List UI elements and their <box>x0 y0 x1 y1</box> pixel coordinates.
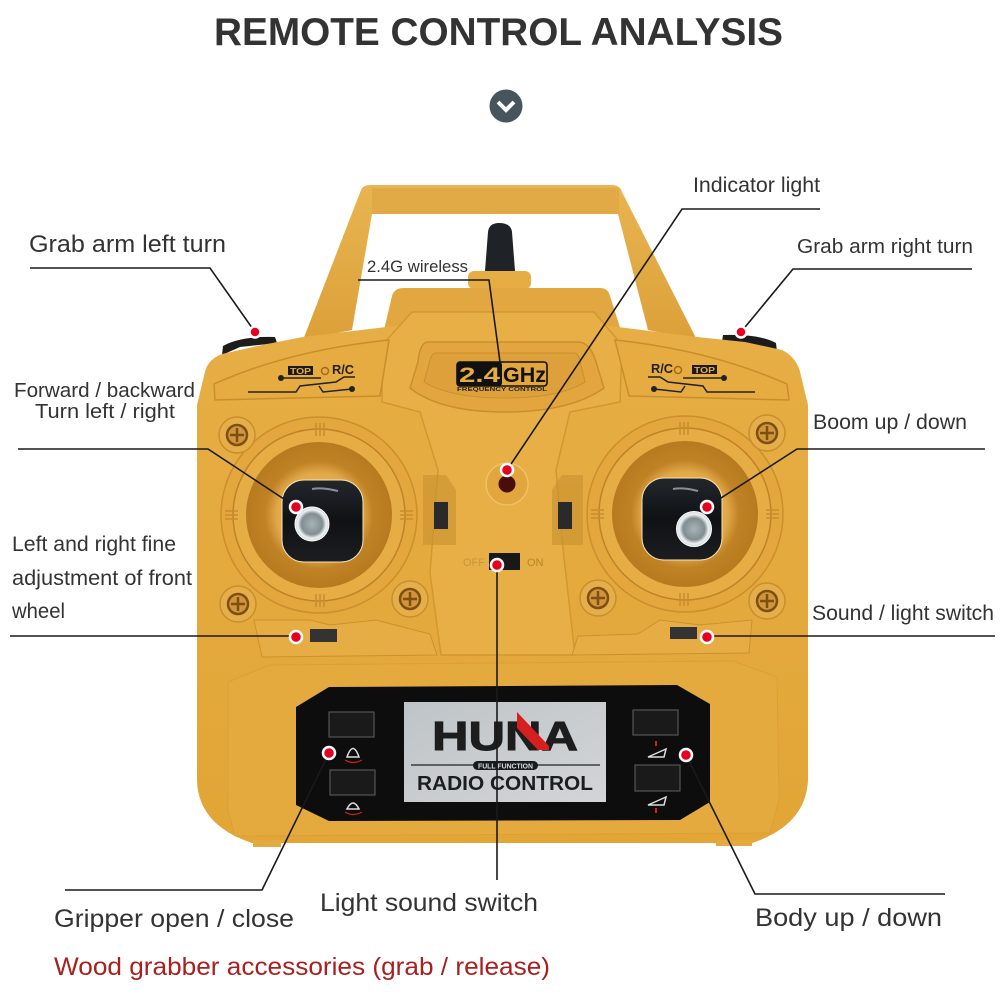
label: wood grabber accessories: Wood grabber accessories (grab / release) <box>54 953 550 981</box>
frequency plate: FREQUENCY CONTROL <box>457 387 548 393</box>
power switch: ON <box>527 557 544 569</box>
right shoulder panel: R/C <box>651 361 674 376</box>
power switch: OFF <box>463 557 485 569</box>
left shoulder panel: R/C <box>332 362 355 377</box>
buttons left <box>329 712 375 814</box>
label: fine adjustment <box>11 533 192 623</box>
label: left stick: Forward / backward <box>14 380 195 402</box>
logo plate: RADIO CONTROL <box>417 773 593 795</box>
right shoulder panel <box>615 340 789 400</box>
handle <box>303 185 697 340</box>
logo plate <box>404 702 606 802</box>
feet <box>253 840 752 847</box>
logo plate: FULL FUNCTION <box>478 764 533 770</box>
label: grab arm right turn: Grab arm right turn <box>797 236 973 258</box>
main body <box>197 325 808 843</box>
label: grab arm left turn: Grab arm left turn <box>29 231 226 258</box>
label: sound / light switch: Sound / light switch <box>812 602 994 625</box>
title: REMOTE CONTROL ANALYSIS <box>214 11 783 54</box>
label: fine adjustment: adjustment of front <box>12 567 192 590</box>
label: gripper open / close: Gripper open / close <box>54 905 294 933</box>
indicator LED <box>486 463 528 505</box>
right shoulder panel: TOP <box>694 366 716 375</box>
label: fine adjustment: wheel <box>11 600 65 623</box>
power switch <box>463 553 544 570</box>
label: left stick <box>14 380 195 423</box>
frequency plate <box>410 342 604 412</box>
frequency plate: GHz <box>503 364 546 387</box>
label: boom up / down: Boom up / down <box>813 411 967 434</box>
remote control device <box>197 185 808 847</box>
label: body up / down: Body up / down <box>755 904 942 932</box>
label: light sound switch: Light sound switch <box>320 889 538 917</box>
left shoulder panel: TOP <box>290 367 312 376</box>
right gimbal <box>587 416 783 612</box>
label: 2.4G wireless: 2.4G wireless <box>367 258 468 276</box>
leader lines <box>10 209 995 894</box>
lower switch panels <box>254 620 752 657</box>
screws <box>219 415 785 622</box>
handle bar <box>372 188 619 214</box>
shoulder buttons <box>222 335 777 355</box>
label: fine adjustment: Left and right fine <box>12 533 176 556</box>
antenna <box>468 223 531 289</box>
label: indicator light: Indicator light <box>693 174 820 197</box>
top block <box>384 288 624 340</box>
central raised column <box>382 312 622 655</box>
red callout dots <box>250 326 746 761</box>
frequency plate: 2.4 <box>459 364 500 387</box>
buttons right <box>633 710 680 813</box>
logo plate: HUNA <box>432 713 578 759</box>
label: left stick: Turn left / right <box>35 401 175 423</box>
icon: chevron down <box>490 90 522 122</box>
trim slide switches <box>423 475 583 545</box>
left shoulder panel <box>214 340 389 400</box>
left gimbal <box>221 417 417 613</box>
lower panel <box>228 661 779 836</box>
